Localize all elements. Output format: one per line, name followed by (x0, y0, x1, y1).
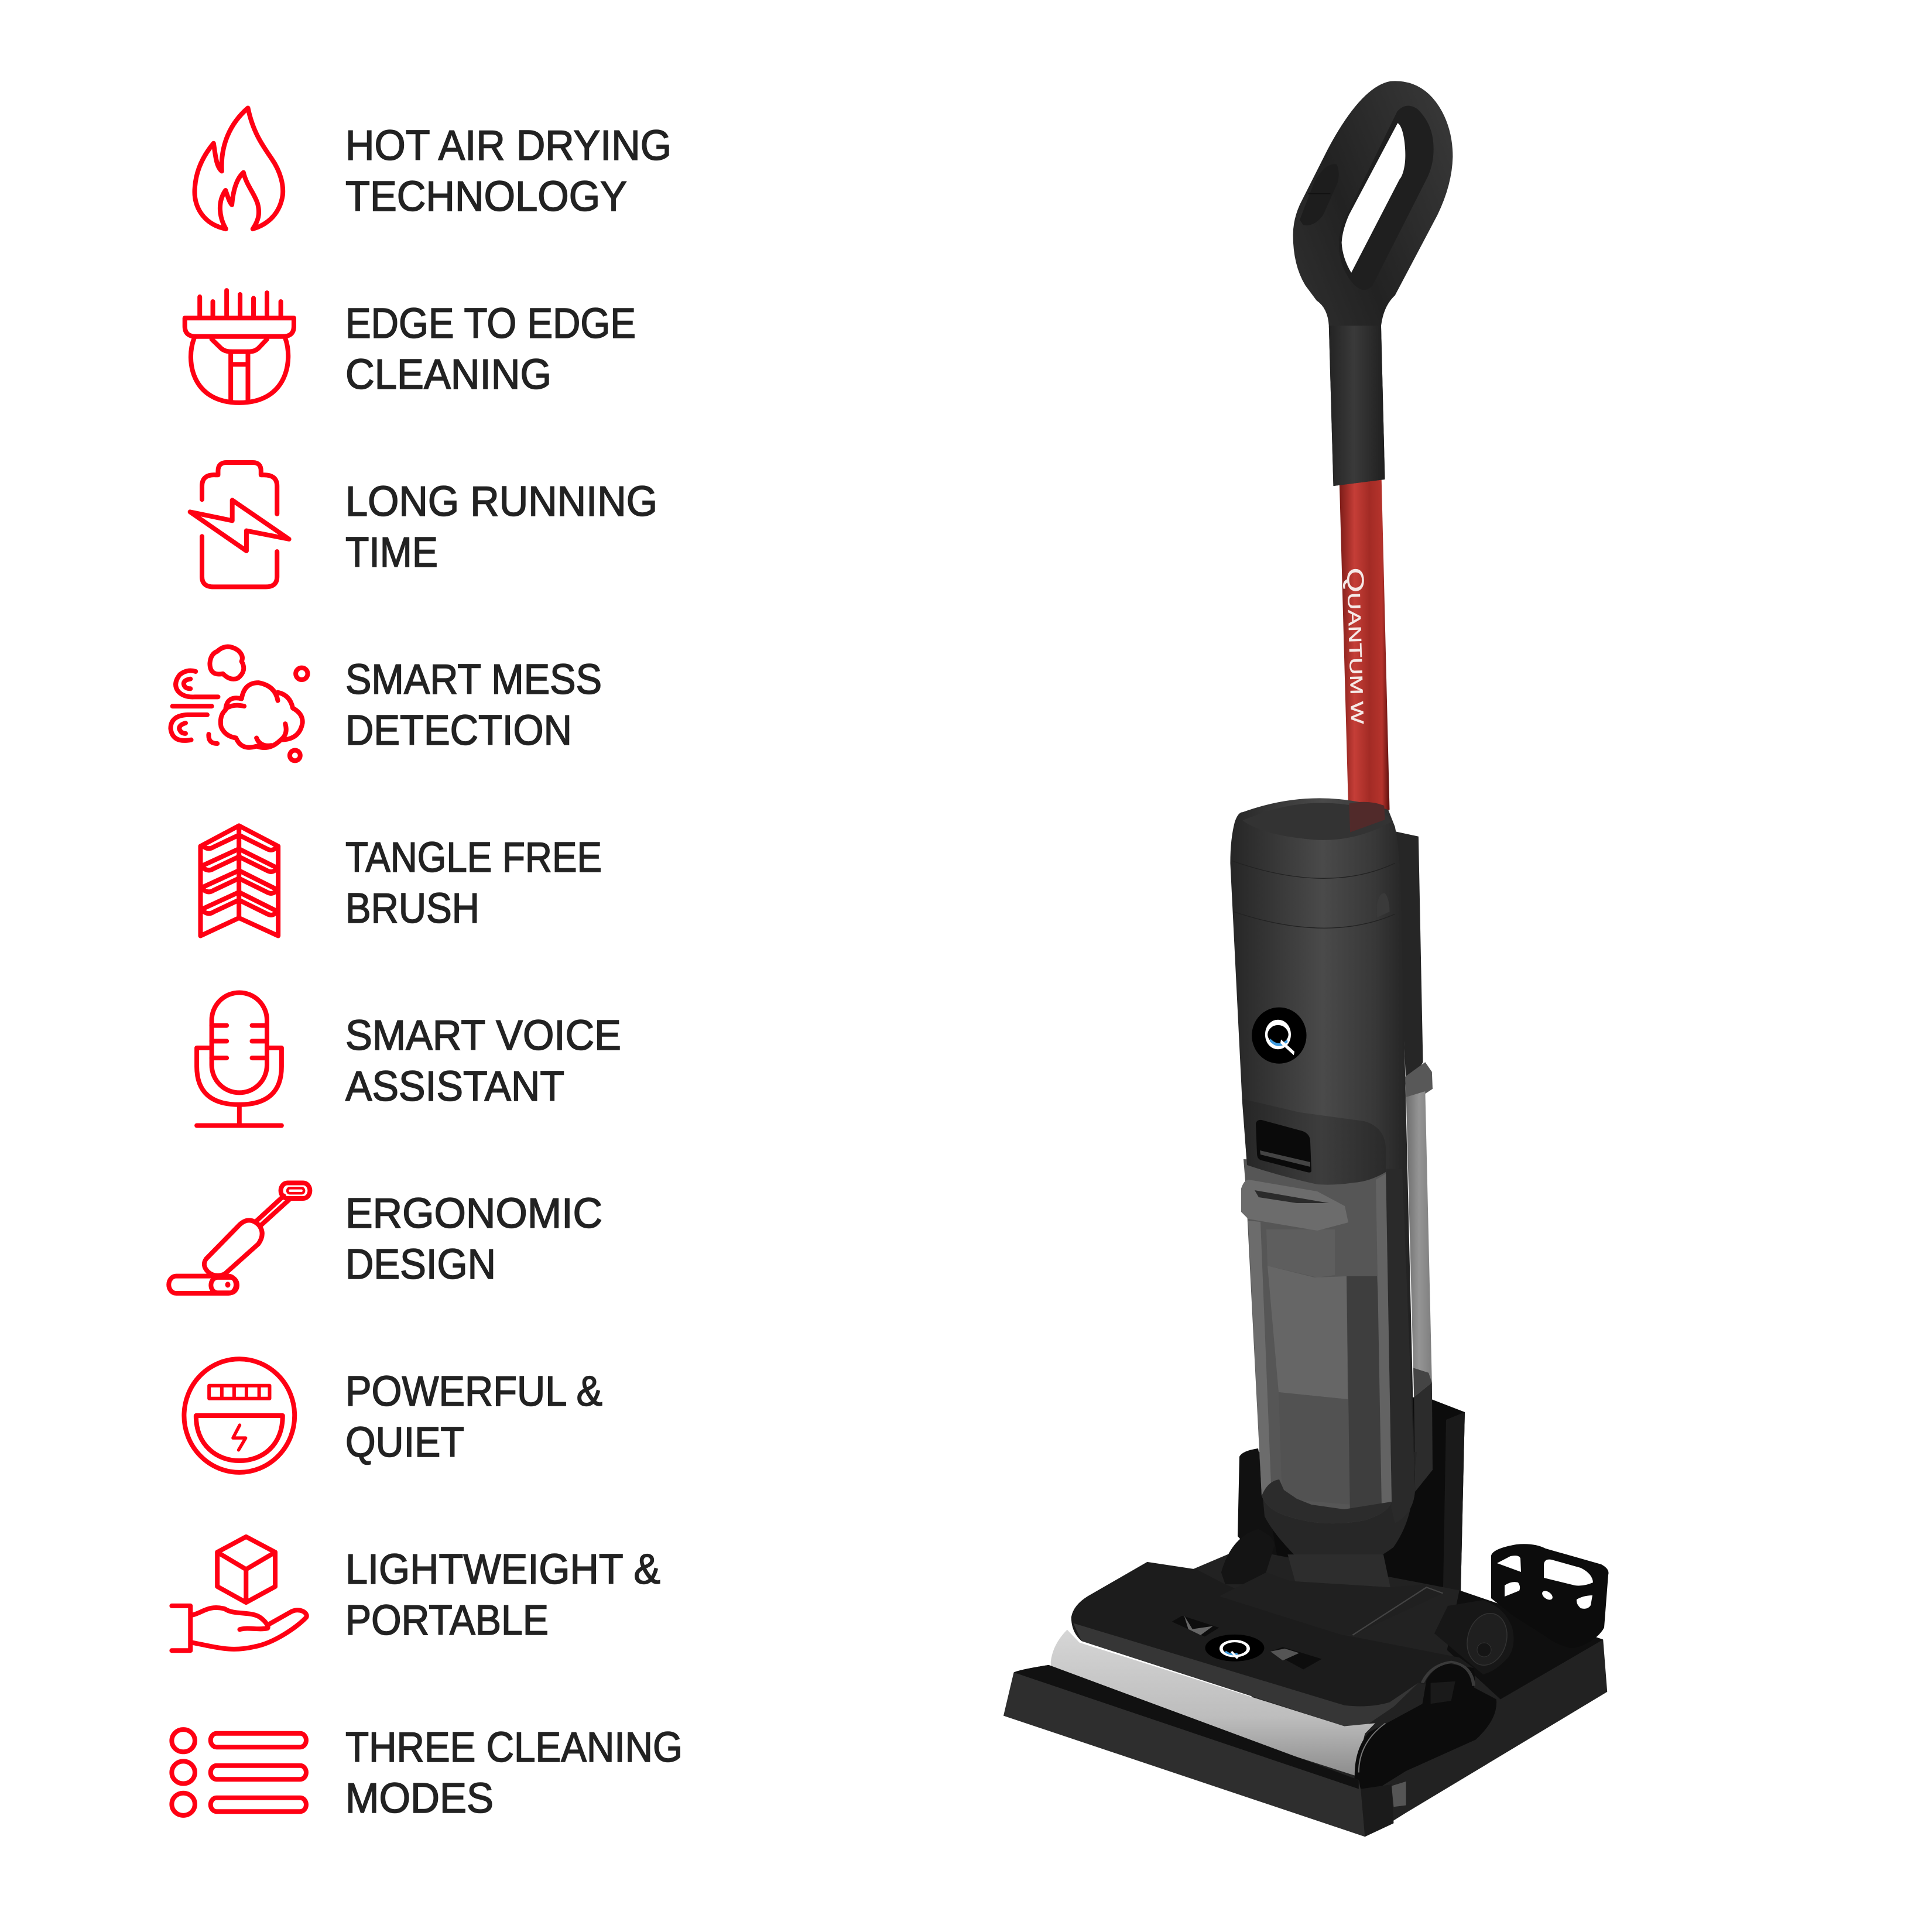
icon: mini vacuum (169, 1183, 310, 1293)
logo badge on body (1252, 1008, 1307, 1064)
feature label: powerful and quiet: POWERFUL & (345, 1368, 602, 1415)
side water tank and rear housing (1396, 831, 1433, 1492)
feature label: three cleaning modes: THREE CLEANING (345, 1724, 683, 1771)
icon: microphone (197, 992, 282, 1126)
feature label: lightweight and portable (345, 1546, 660, 1644)
icon: flame (195, 108, 283, 229)
feature label: lightweight and portable: LIGHTWEIGHT & (345, 1546, 660, 1593)
transparent dirty water tank (1241, 1159, 1392, 1523)
front lip of cover (1073, 1623, 1419, 1726)
main body housing (1230, 798, 1415, 1523)
feature label: smart mess detection: SMART MESS (345, 656, 602, 703)
icon: edge to edge brush (185, 290, 294, 403)
handle grip (1293, 81, 1453, 486)
tube seen through lid (1349, 802, 1385, 833)
right wall (1376, 1174, 1392, 1508)
right chamber (1347, 1276, 1389, 1516)
feature label: edge to edge cleaning: EDGE TO EDGE (345, 300, 636, 347)
feature label: tangle free brush: TANGLE FREE (345, 834, 602, 881)
feature label: tangle free brush (345, 834, 602, 932)
feature label: smart mess detection (345, 656, 602, 754)
head top cover (1071, 1562, 1474, 1726)
feature label: long running time: TIME (345, 529, 438, 576)
icon: power gauge (184, 1359, 294, 1472)
mop roller (1051, 1630, 1375, 1776)
front tray lip (1003, 1665, 1365, 1837)
feature label: long running time (345, 478, 657, 576)
feature label: hot air drying technology: HOT AIR DRYING (345, 122, 672, 169)
feature label: edge to edge cleaning: CLEANING (345, 351, 551, 398)
feature label: ergonomic design: DESIGN (345, 1241, 496, 1288)
feature label: long running time: LONG RUNNING (345, 478, 657, 525)
feature label: three cleaning modes (345, 1724, 683, 1822)
tank bottom shade (1262, 1479, 1392, 1523)
feature label: hot air drying technology (345, 122, 672, 220)
dust tank panel and window (1242, 1099, 1386, 1185)
control slots (1172, 1616, 1219, 1636)
inner lower dim (1279, 1392, 1351, 1505)
icon: three modes list (172, 1729, 306, 1815)
roller end cap (1355, 1663, 1496, 1790)
icon: hand holding box (172, 1537, 307, 1650)
badge (1205, 1635, 1264, 1662)
product: upright floor washer (1003, 81, 1609, 1837)
tube branding: Q UANTUM W (1342, 567, 1372, 725)
neck plate (1219, 1573, 1443, 1635)
feature label: ergonomic design (345, 1190, 602, 1288)
icon: battery with bolt (190, 463, 289, 587)
feature label: smart voice assistant: ASSISTANT (345, 1063, 564, 1110)
feature label: ergonomic design: ERGONOMIC (345, 1190, 602, 1237)
inner filter lower (1268, 1266, 1348, 1399)
icon: chevron brush (200, 825, 278, 936)
tank lip (1241, 1180, 1348, 1231)
feature label: edge to edge cleaning (345, 300, 636, 398)
inner filter upper (1266, 1229, 1335, 1277)
feature label: lightweight and portable: PORTABLE (345, 1597, 549, 1644)
feature label: hot air drying technology: TECHNOLOGY (345, 173, 627, 220)
icon: dust clouds (170, 647, 308, 761)
feature label: smart voice assistant (345, 1012, 621, 1110)
dock: tray (1193, 1549, 1607, 1837)
feature label: smart mess detection: DETECTION (345, 707, 572, 754)
left wheel (1221, 1529, 1275, 1584)
feature label: three cleaning modes: MODES (345, 1775, 494, 1822)
feature label: smart voice assistant: SMART VOICE (345, 1012, 621, 1059)
red extension tube (1340, 479, 1390, 833)
feature label: tangle free brush: BRUSH (345, 885, 479, 932)
dock: cup holder (1491, 1544, 1609, 1648)
feature label: powerful and quiet: QUIET (345, 1419, 464, 1466)
rear wheel (1434, 1600, 1513, 1674)
floor head assembly (1003, 1529, 1496, 1837)
left wall highlight (1248, 1221, 1272, 1499)
dirty tank base cup (1259, 1452, 1417, 1561)
swivel joint (1287, 1554, 1390, 1587)
dock: rear stand (1238, 1396, 1465, 1592)
feature label: powerful and quiet (345, 1368, 602, 1466)
